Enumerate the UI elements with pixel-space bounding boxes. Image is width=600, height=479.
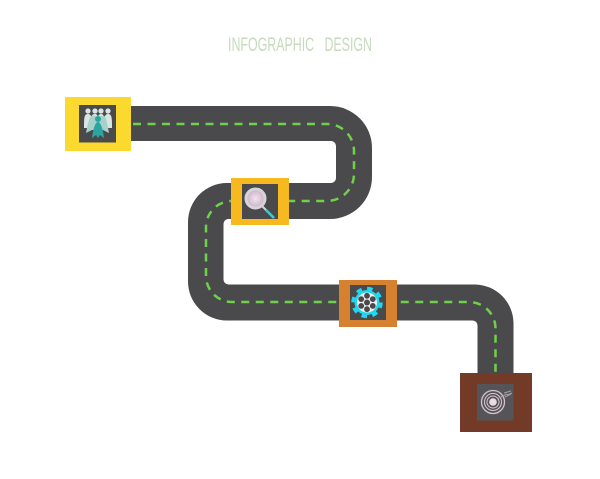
icon: gear wheel	[353, 288, 381, 316]
step 2: magnifier icon tile	[231, 178, 289, 225]
step 4: target icon tile	[460, 373, 532, 432]
icon: target with arrow	[482, 390, 512, 414]
step 3: gear icon tile	[339, 280, 397, 327]
icon: magnifying glass	[246, 189, 274, 218]
icon: people group	[84, 108, 112, 138]
step 1: people icon tile	[65, 97, 131, 151]
road centre dashes	[133, 124, 496, 372]
winding road	[125, 106, 514, 380]
title: INFOGRAPHIC DESIGN	[228, 35, 372, 56]
